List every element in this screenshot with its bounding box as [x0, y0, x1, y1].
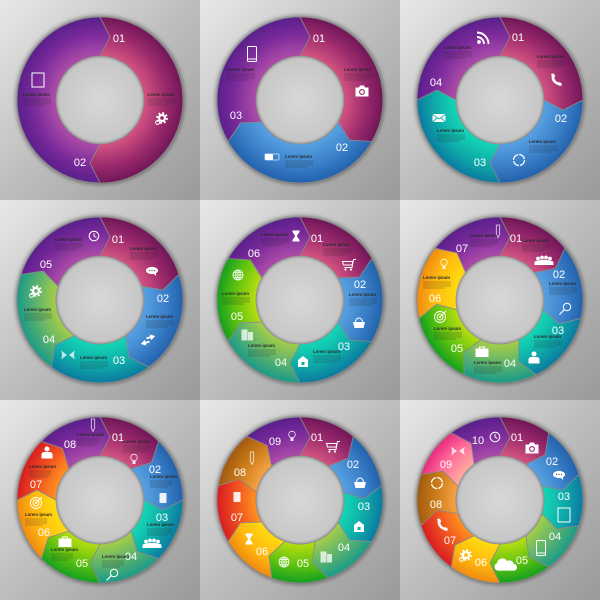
- segment 06: [221, 513, 288, 578]
- icon: mobile: [536, 540, 546, 556]
- ring chart: 9 segments: [217, 417, 384, 584]
- icon: wave: [451, 446, 465, 456]
- icon: camera: [526, 442, 538, 454]
- segment 05: [406, 297, 488, 375]
- number 02: 02: [546, 456, 558, 468]
- number 01: 01: [511, 432, 523, 444]
- number 05: 05: [451, 343, 463, 355]
- text block 04: [474, 360, 502, 373]
- number 02: 02: [74, 157, 86, 169]
- panel: ten-step cycle: [400, 400, 600, 600]
- segment 02: [490, 100, 583, 183]
- segment 02: [223, 79, 372, 213]
- icon: cloud: [495, 558, 517, 571]
- number 04: 04: [275, 357, 287, 369]
- text block right: [148, 92, 176, 105]
- icon: pencil: [250, 452, 254, 464]
- segment 07: [435, 198, 519, 283]
- number 09: 09: [440, 459, 452, 471]
- text block 03: [437, 128, 465, 141]
- text block 07: Lorem ipsum: [29, 464, 56, 469]
- number 06: 06: [475, 557, 487, 569]
- panel: six-step cycle: [200, 200, 400, 400]
- text block 05: Lorem ipsum: [51, 547, 78, 552]
- number 01: 01: [311, 233, 323, 245]
- number 03: 03: [156, 512, 168, 524]
- number 05: 05: [231, 311, 243, 323]
- text block right: Lorem ipsum: [148, 92, 175, 97]
- text block 01: Lorem ipsum: [522, 238, 549, 243]
- text block 03: Lorem ipsum: [227, 67, 254, 72]
- segment 01: [500, 417, 549, 464]
- icon: people: [534, 256, 554, 265]
- text block 06: [25, 512, 52, 525]
- number 04: 04: [430, 77, 442, 89]
- segment 10: [451, 404, 519, 471]
- text block 03: [313, 349, 341, 362]
- icon: magnifier: [106, 569, 118, 580]
- segment 03: [187, 7, 336, 142]
- segment 01: [300, 17, 383, 142]
- panel: nine-step cycle: [200, 400, 400, 600]
- icon: tablet: [32, 73, 44, 87]
- icon: clock: [89, 231, 99, 241]
- text block 04: Lorem ipsum: [474, 360, 501, 365]
- number 02: 02: [347, 459, 359, 471]
- segment 05: [481, 529, 549, 596]
- number 02: 02: [149, 464, 161, 476]
- icon: briefcase: [58, 537, 72, 547]
- icon: basket: [354, 478, 366, 488]
- icon: mobile: [248, 46, 256, 62]
- icon: bulb: [441, 259, 447, 269]
- number 01: 01: [313, 33, 325, 45]
- number 02: 02: [157, 293, 169, 305]
- icon: gear: [460, 550, 471, 561]
- icon: tablet: [558, 508, 570, 522]
- segment 04: [228, 322, 300, 383]
- icon: home: [298, 356, 308, 367]
- icon: globe: [279, 557, 289, 567]
- segment 04: [302, 517, 372, 588]
- segment 04: [80, 522, 159, 600]
- icon: handset: [551, 74, 562, 86]
- text block 05: [222, 291, 250, 304]
- number 05: 05: [516, 555, 528, 567]
- icon: buildings: [242, 330, 253, 340]
- text block 03: Lorem ipsum: [534, 334, 561, 339]
- text block 02: [285, 154, 313, 167]
- number 06: 06: [38, 527, 50, 539]
- icon: person: [528, 352, 540, 364]
- text block 02: Lorem ipsum: [529, 139, 556, 144]
- segment 07: [412, 500, 479, 567]
- text block 04: Lorem ipsum: [248, 343, 275, 348]
- segment 01: [500, 217, 565, 273]
- segment 08: [406, 465, 466, 526]
- text block 04: Lorem ipsum: [102, 554, 129, 559]
- number 01: 01: [112, 234, 124, 246]
- text block 05: [55, 237, 83, 250]
- number 08: 08: [64, 439, 76, 451]
- panel: eight-step cycle: [0, 400, 200, 600]
- icon: basket: [353, 318, 365, 328]
- number 04: 04: [43, 334, 55, 346]
- text block 06: Lorem ipsum: [25, 512, 52, 517]
- segment 04: [453, 325, 536, 403]
- segment 09: [247, 402, 319, 474]
- number 03: 03: [230, 110, 242, 122]
- number 06: 06: [256, 546, 268, 558]
- icon: wave: [61, 350, 75, 360]
- text block 06: Lorem ipsum: [423, 275, 450, 280]
- segment 03: [131, 500, 183, 559]
- icon: buildings: [320, 552, 332, 562]
- number 02: 02: [553, 269, 565, 281]
- segment 02: [322, 436, 394, 509]
- segment 01: [100, 217, 179, 290]
- panel: three-step cycle: [200, 0, 400, 200]
- ring chart: 5 segments: [17, 218, 184, 384]
- segment 04: [417, 17, 510, 100]
- icon: pencil: [91, 419, 95, 432]
- number 03: 03: [338, 341, 350, 353]
- text block 01: Lorem ipsum: [344, 67, 371, 72]
- icon: magnifier: [560, 303, 571, 314]
- number 07: 07: [30, 479, 42, 491]
- icon: refresh: [514, 154, 524, 166]
- number 06: 06: [248, 248, 260, 260]
- text block 07: [29, 464, 56, 477]
- panel: four-step cycle: [400, 0, 600, 200]
- number 04: 04: [549, 531, 561, 543]
- number 04: 04: [338, 542, 350, 554]
- text block 07: [470, 233, 498, 246]
- text block 02: Lorem ipsum: [146, 314, 173, 319]
- text block 05: Lorem ipsum: [55, 237, 82, 242]
- ring chart: 4 segments: [417, 17, 583, 183]
- ring chart: 3 segments: [217, 18, 384, 184]
- panel: two-step cycle: [0, 0, 200, 200]
- icon: cart: [342, 260, 356, 271]
- icon: camera: [356, 86, 368, 96]
- text block 02: Lorem ipsum: [285, 154, 312, 159]
- text block 03: Lorem ipsum: [313, 349, 340, 354]
- ring chart: 7 segments: [417, 218, 584, 384]
- text block 02: [150, 474, 177, 487]
- number 05: 05: [76, 558, 88, 570]
- number 04: 04: [125, 551, 137, 563]
- text block 02: [549, 281, 577, 294]
- ring chart: 6 segments: [217, 218, 384, 384]
- icon: pencil: [496, 225, 500, 238]
- number 01: 01: [113, 33, 125, 45]
- ring chart: 8 segments: [17, 418, 184, 584]
- text block 05: Lorem ipsum: [222, 291, 249, 296]
- number 01: 01: [512, 32, 524, 44]
- text block 01: Lorem ipsum: [130, 246, 157, 251]
- text block 02: Lorem ipsum: [549, 281, 576, 286]
- icon: envelope: [432, 114, 446, 122]
- segment 01: [300, 417, 353, 466]
- text block left: [23, 92, 51, 105]
- number 05: 05: [297, 558, 309, 570]
- text block 01: [130, 246, 158, 259]
- number 03: 03: [358, 501, 370, 513]
- icon: briefcase: [476, 347, 488, 357]
- number 03: 03: [113, 355, 125, 367]
- icon: hourglass: [292, 230, 300, 242]
- number 03: 03: [552, 325, 564, 337]
- icon: gear: [30, 286, 41, 297]
- text block 04: [248, 343, 276, 356]
- segment 06: [0, 480, 78, 559]
- icon: target: [434, 311, 446, 322]
- number 09: 09: [269, 436, 281, 448]
- icon: chat: [553, 471, 565, 480]
- icon: arrows: [139, 333, 157, 347]
- segment 05: [41, 531, 100, 583]
- text block 04: Lorem ipsum: [24, 307, 51, 312]
- icon: refresh: [432, 478, 442, 488]
- segment 02: [521, 248, 600, 334]
- segment 05: [21, 199, 115, 297]
- text block 03: Lorem ipsum: [147, 522, 174, 527]
- number 07: 07: [456, 243, 468, 255]
- segment 02: [319, 258, 408, 351]
- segment 05: [261, 532, 328, 596]
- ring chart: 10 segments: [417, 418, 584, 584]
- text block 02: [529, 139, 557, 152]
- segment 03: [283, 311, 372, 404]
- text block 05: [51, 547, 78, 560]
- number 02: 02: [354, 279, 366, 291]
- number 04: 04: [504, 358, 516, 370]
- segment 08: [218, 433, 276, 494]
- text block 02: Lorem ipsum: [349, 292, 376, 297]
- number 01: 01: [112, 432, 124, 444]
- number 02: 02: [555, 113, 567, 125]
- segment 03: [417, 90, 500, 183]
- segment 02: [17, 17, 110, 183]
- segment 03: [534, 474, 594, 535]
- text block 07: Lorem ipsum: [470, 233, 497, 238]
- segment 04: [519, 511, 579, 572]
- number 03: 03: [558, 491, 570, 503]
- text block 04: Lorem ipsum: [444, 45, 471, 50]
- text block 01: Lorem ipsum: [537, 54, 564, 59]
- icon: people: [142, 539, 162, 548]
- segment 03: [333, 486, 391, 547]
- icon: bulb: [131, 454, 137, 464]
- icon: chat: [146, 267, 158, 276]
- text block 01: Lorem ipsum: [123, 439, 150, 444]
- icon: home: [354, 521, 364, 532]
- text block 01: [323, 242, 351, 255]
- segment 04: [0, 262, 94, 367]
- segment 01: [100, 417, 159, 469]
- icon: target: [30, 497, 42, 508]
- text block 04: [24, 307, 52, 320]
- text block 03: Lorem ipsum: [437, 128, 464, 133]
- text block 04: [444, 45, 472, 58]
- icon: clipboard: [234, 492, 240, 502]
- number 01: 01: [510, 233, 522, 245]
- text block 08: [77, 432, 104, 445]
- number 07: 07: [231, 512, 243, 524]
- text block 02: [349, 292, 377, 305]
- number 08: 08: [234, 467, 246, 479]
- segment 02: [109, 274, 203, 372]
- number 05: 05: [40, 259, 52, 271]
- segment 07: [17, 441, 69, 500]
- segment 01: [300, 217, 372, 278]
- panel: seven-step cycle: [400, 198, 600, 403]
- number 07: 07: [444, 535, 456, 547]
- text block 06: Lorem ipsum: [261, 232, 288, 237]
- text block 01: [537, 54, 565, 67]
- segment 03: [512, 306, 581, 382]
- segment 03: [42, 308, 149, 414]
- segment 01: [500, 17, 583, 110]
- icon: toggle: [265, 154, 279, 160]
- text block 03: Lorem ipsum: [80, 355, 107, 360]
- panel: five-step cycle: [0, 199, 203, 414]
- icon: hourglass: [246, 534, 252, 544]
- text block 06: [423, 275, 451, 288]
- segment 08: [41, 400, 120, 478]
- text block 01: Lorem ipsum: [323, 242, 350, 247]
- number 03: 03: [474, 157, 486, 169]
- number 08: 08: [430, 499, 442, 511]
- text block left: Lorem ipsum: [23, 92, 50, 97]
- icon: handset: [437, 518, 448, 531]
- icon: clipboard: [160, 493, 166, 503]
- icon: person: [42, 446, 52, 458]
- text block 01: [344, 67, 372, 80]
- text block 03: [147, 522, 174, 535]
- segment 05: [192, 249, 281, 342]
- number 10: 10: [472, 435, 484, 447]
- text block 02: Lorem ipsum: [150, 474, 177, 479]
- segment 06: [405, 243, 473, 318]
- text block 01: [522, 238, 550, 251]
- segment 06: [228, 196, 317, 289]
- icon: rss: [477, 32, 488, 44]
- number 02: 02: [336, 142, 348, 154]
- segment 02: [521, 433, 588, 500]
- number 06: 06: [429, 293, 441, 305]
- segment 07: [201, 471, 271, 542]
- text block 01: [123, 439, 151, 452]
- text block 08: Lorem ipsum: [77, 432, 104, 437]
- segment 06: [451, 536, 500, 583]
- icon: clock: [490, 432, 500, 442]
- icon: bulb: [289, 431, 295, 441]
- number 01: 01: [311, 432, 323, 444]
- text block 03: [80, 355, 108, 368]
- icon: cart: [326, 442, 340, 453]
- text block 04: [102, 554, 129, 567]
- segment 01: [90, 17, 183, 183]
- text block 05: Lorem ipsum: [434, 326, 461, 331]
- icon: globe: [233, 270, 243, 280]
- segment 02: [122, 441, 200, 520]
- icon: gear: [156, 113, 167, 124]
- segment 09: [421, 428, 481, 489]
- text block 02: [146, 314, 174, 327]
- text block 05: [434, 326, 462, 339]
- ring chart: 2 segments: [17, 17, 183, 183]
- text block 03: [227, 67, 255, 80]
- text block 03: [534, 334, 562, 347]
- text block 06: [261, 232, 289, 245]
